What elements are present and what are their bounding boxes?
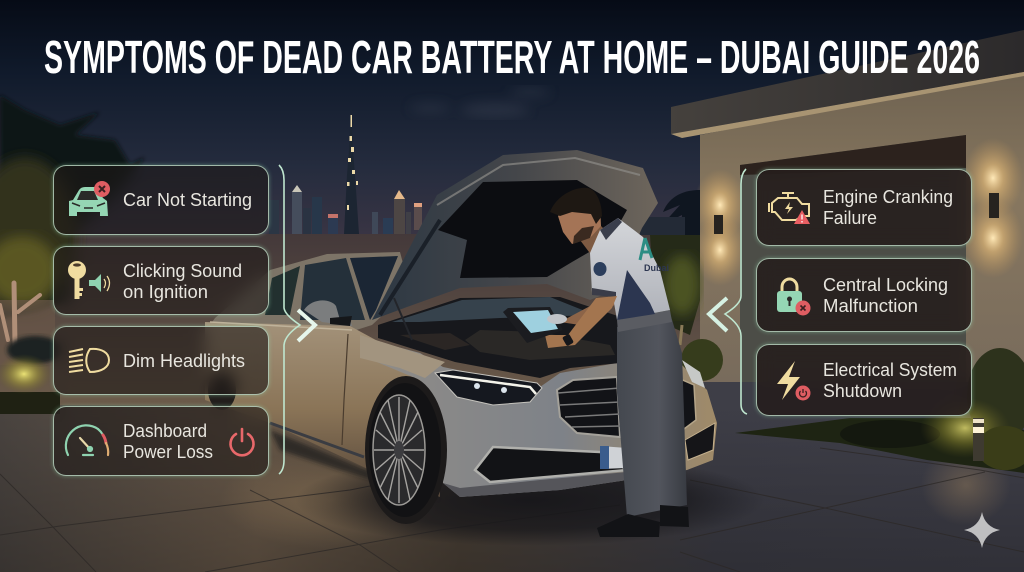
icon: speedometer [65,425,108,454]
car shadow [295,454,765,546]
icon: lightning with power badge [776,360,810,400]
panel: Electrical System Shutdown [756,344,972,416]
car: side body [205,322,440,497]
right lawn, shrubs and bollard light [735,348,1024,473]
house [671,30,1024,382]
left tree and bush [0,95,145,414]
label: Car Not Starting: Car Not Starting [122,190,252,210]
car: headlight [435,370,542,405]
left bracket [279,165,300,474]
label: Central Locking Malfunction [822,274,948,316]
mechanic: shirt [590,218,670,320]
icon: car with red x [68,180,110,216]
label: Dim Headlights: Dim Headlights [122,350,244,370]
right bracket [725,169,747,414]
car: wheel arch [365,376,447,524]
car: side mirror [304,300,352,326]
label: Dashboard Power Loss: Dashboard [122,420,206,440]
icon: power symbol [230,428,253,455]
panel: Clicking Sound on Ignition [53,246,269,315]
panel: Central Locking Malfunction [756,258,972,332]
back wall [0,234,720,414]
mechanic: far arm [560,303,618,325]
panel: Dashboard Power Loss [53,406,269,476]
mechanic: logo [640,238,669,273]
car [205,150,717,524]
mechanic: trousers [617,313,687,517]
mechanic: head [558,200,601,244]
icon: dim headlight [68,348,108,372]
mechanic: logo: Dubai [644,263,669,273]
Dubai skyline [269,105,422,235]
mechanic: neck [580,225,607,256]
label: Dashboard Power Loss [122,420,212,462]
icon: key and speaker [68,260,109,298]
car: rear wheel [208,370,236,410]
label: Engine Cranking Failure [822,186,952,228]
car: front body [372,340,717,497]
mechanic: boots [597,514,660,537]
car: hood prop [394,298,412,340]
background palm and hedge [640,190,723,381]
panel: Car Not Starting [53,165,269,235]
label: Central Locking Malfunction: Malfunction [822,296,918,316]
mechanic: tablet [503,307,563,343]
label: Clicking Sound on Ignition: on Ignition [122,282,208,302]
label: Electrical System Shutdown: Electrical System [822,360,956,380]
label: Electrical System Shutdown [822,360,956,400]
car: front wheel [369,383,441,517]
car: grille [557,377,620,437]
label: Electrical System Shutdown: Shutdown [822,380,902,400]
panel: Dim Headlights [53,326,269,395]
mechanic [503,188,689,537]
label: Clicking Sound on Ignition: Clicking Sound [122,260,242,280]
panel: Engine Cranking Failure [756,169,972,246]
arrow: left chevron [298,310,315,341]
car: lower intake [475,447,627,482]
car: cabin [210,252,410,332]
label: Clicking Sound on Ignition [122,260,242,302]
icon: engine warning [768,192,810,224]
icon: padlock with x [776,278,810,315]
label: Central Locking Malfunction: Central Locking [822,274,948,294]
icon: sparkle watermark [964,512,1000,548]
label: Engine Cranking Failure: Failure [822,208,876,228]
mechanic: near arm [545,296,617,348]
car: raised hood [372,150,658,320]
driveway ground [0,380,1024,572]
label: Engine Cranking Failure: Engine Cranking [822,186,952,206]
label: Dashboard Power Loss: Power Loss [122,442,212,462]
arrow: right chevron [709,298,727,331]
car: engine bay [378,297,630,378]
